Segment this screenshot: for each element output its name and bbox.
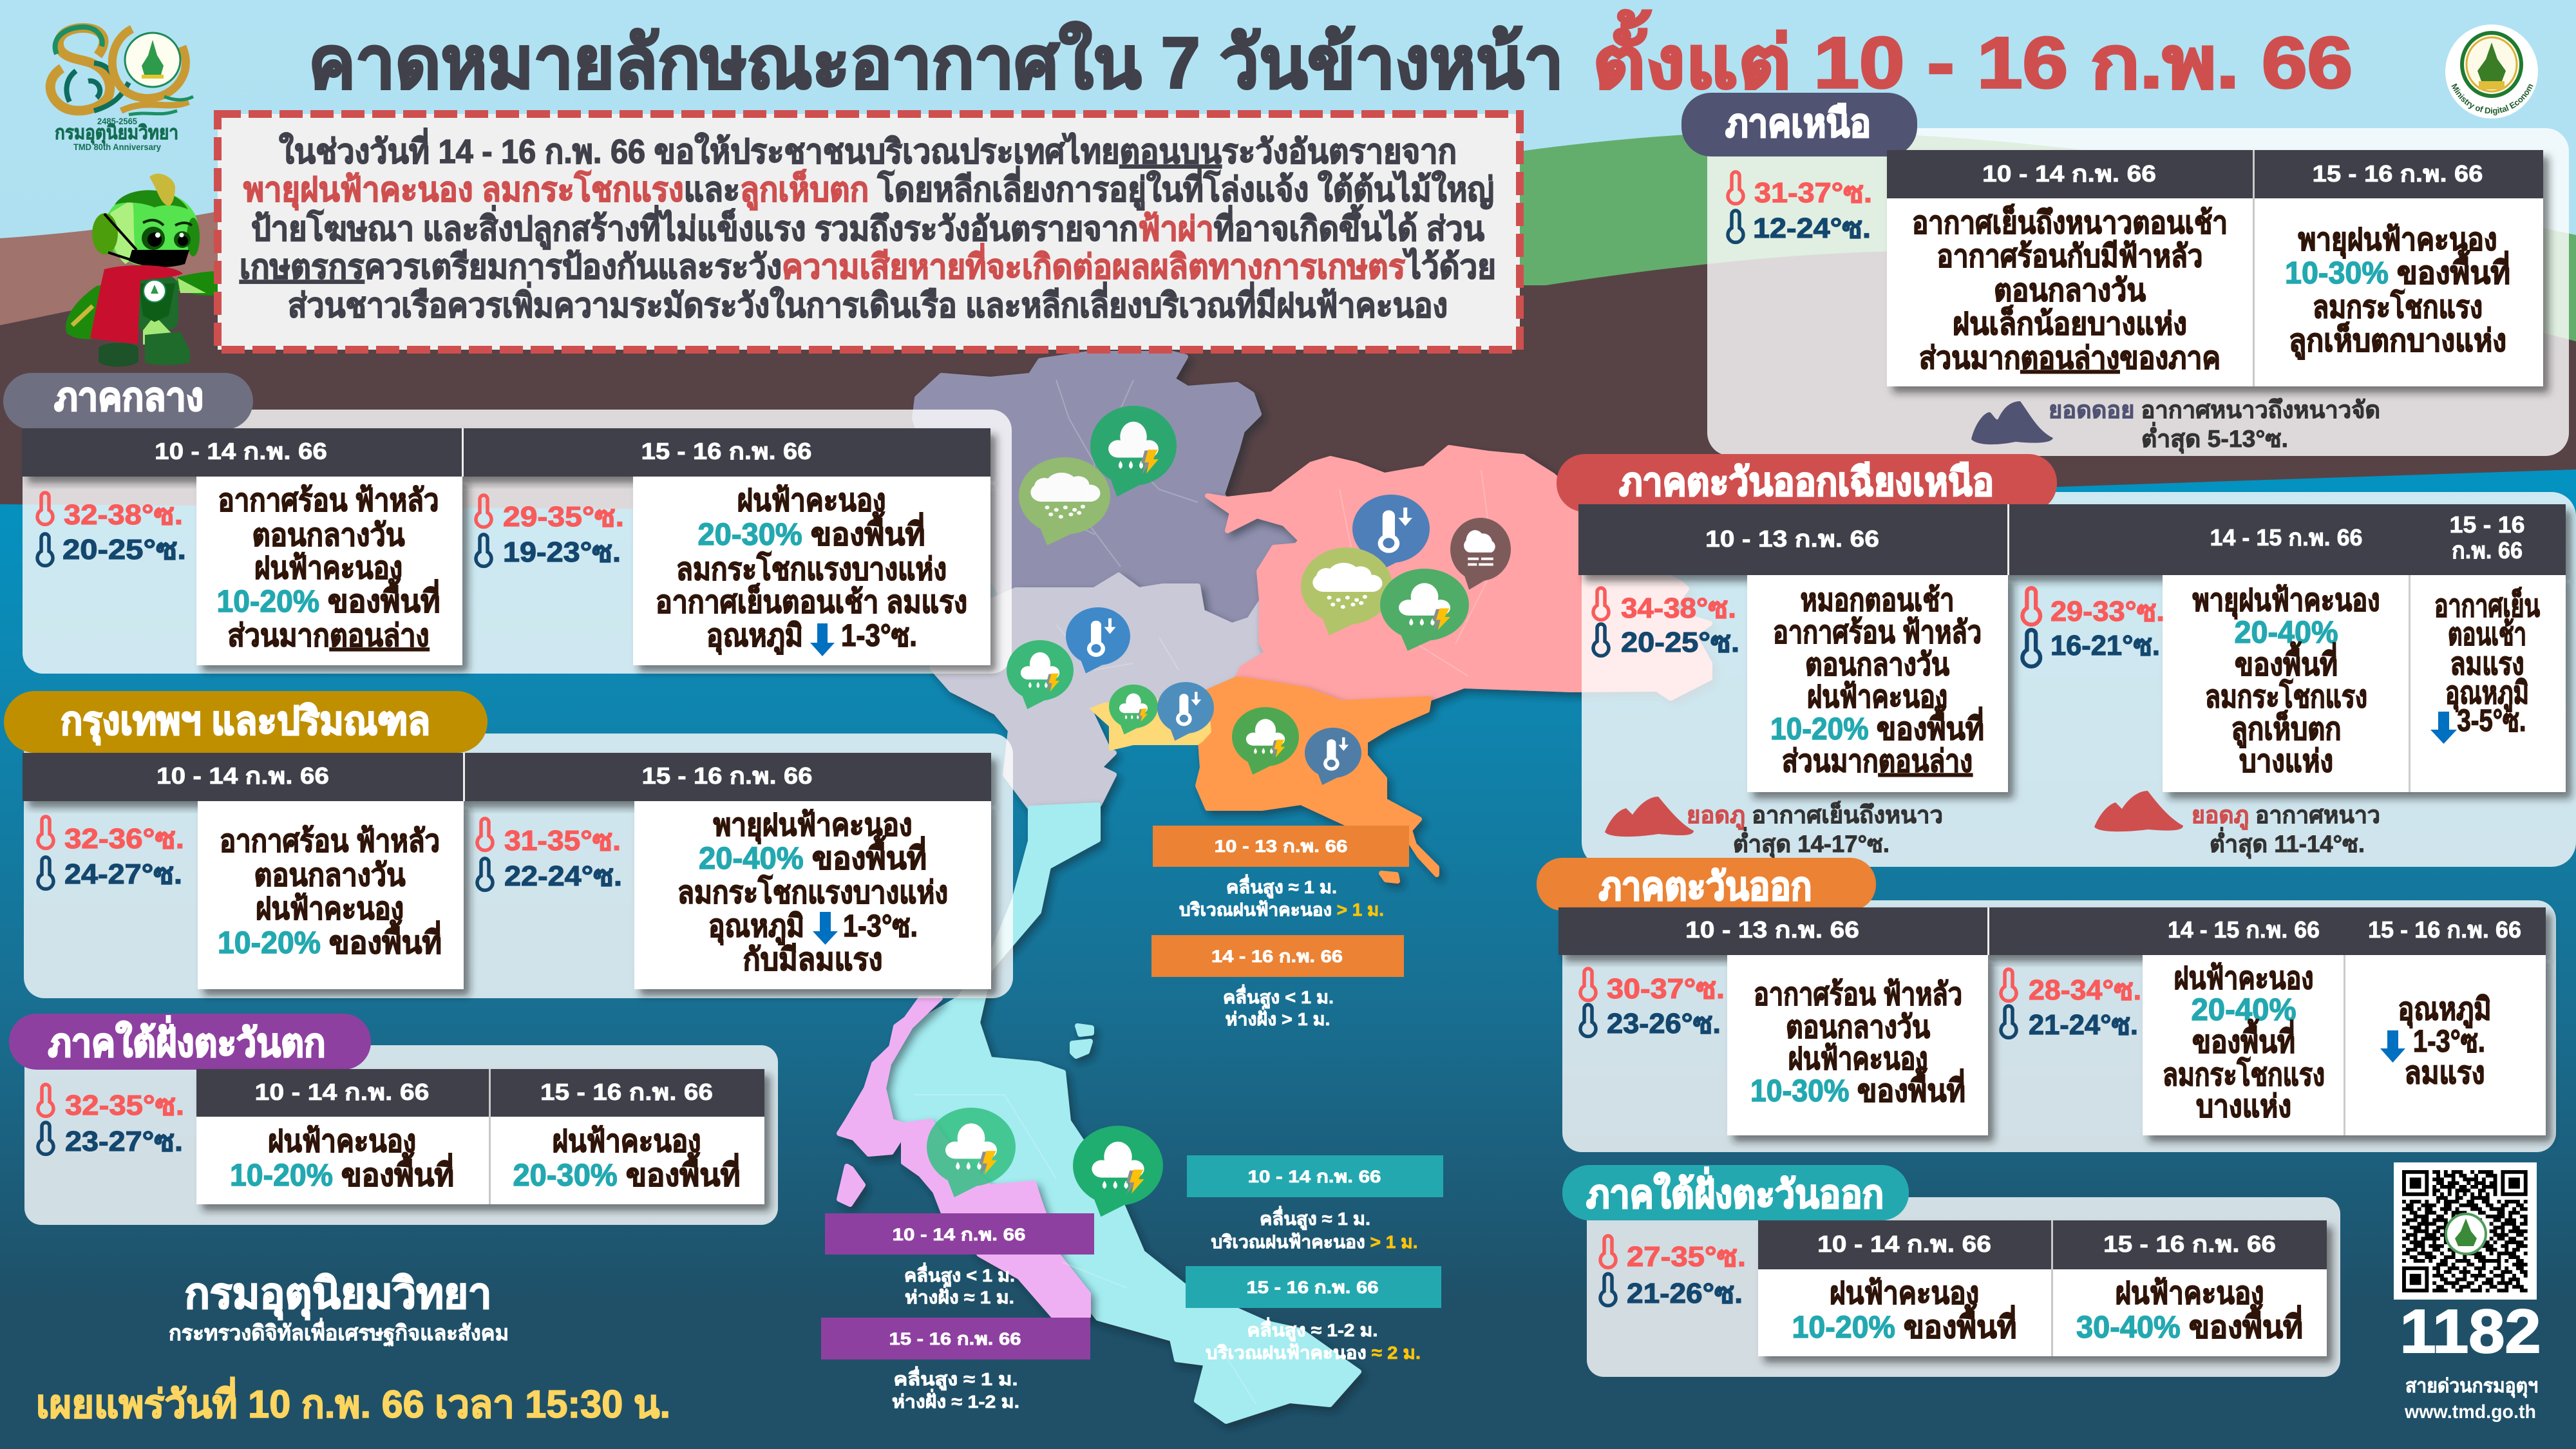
wave box: gulf south 15-16 xyxy=(1186,1266,1441,1363)
summit note: northern: ยอดดอย อากาศหนาวถึงหนาวจัด xyxy=(2049,397,2380,423)
temperatures: northern: 31-37°ซ. xyxy=(1754,177,1872,209)
footer: published date: เผยแพร่วันที่ 10 ก.พ. 66 เวลา 15:30 น. xyxy=(36,1377,670,1426)
table: bangkok: 10 - 14 ก.พ. 66 xyxy=(156,762,329,789)
rose hill xyxy=(0,194,966,399)
temperatures: eastern 14-15: 21-24°ซ. xyxy=(2029,1009,2138,1041)
summit note: northeast left: ต่ำสุด 14-17°ซ. xyxy=(1733,827,1889,859)
map pin: northeast cold xyxy=(1352,495,1430,573)
table: bangkok: 1-3°ซ. xyxy=(843,909,918,943)
table: south west xyxy=(196,1069,764,1204)
temperatures: eastern 14-15: 28-34°ซ. xyxy=(2029,974,2141,1006)
temperatures: northern: 12-24°ซ. xyxy=(1753,213,1871,244)
table: south east: ฝนฟ้าคะนอง xyxy=(2115,1276,2264,1311)
pill: south east: ภาคใต้ฝั่งตะวันออก xyxy=(1586,1167,1884,1216)
temperatures: central 15-16 xyxy=(476,495,624,568)
map pin: northeast fog xyxy=(1450,518,1511,590)
table: south east: 30-40% ของพื้นที่ xyxy=(2076,1304,2303,1345)
temperatures: northeast 10-13: 34-38°ซ. xyxy=(1621,592,1736,624)
ministry logo xyxy=(2445,24,2538,118)
wave box: andaman 10-14 xyxy=(825,1213,1094,1307)
table: eastern: 1-3°ซ. xyxy=(2413,1025,2485,1059)
table: northeast: 10 - 13 ก.พ. 66 xyxy=(1705,526,1879,552)
temperatures: northeast 14-15 xyxy=(2022,588,2164,667)
temperatures: south west: 32-35°ซ. xyxy=(65,1090,184,1121)
table: south west: 10-20% ของพื้นที่ xyxy=(230,1152,454,1193)
table: central: ฝนฟ้าคะนอง xyxy=(737,484,886,518)
temperatures: eastern 10-13 xyxy=(1580,969,1725,1039)
hotline label and website xyxy=(2404,1376,2538,1423)
pill: central xyxy=(3,373,253,430)
table: bangkok xyxy=(23,753,991,989)
table: northeast: 15 - 16 xyxy=(2450,511,2524,538)
logo: TMD 80th anniversary: TMD 80th Anniversary xyxy=(73,142,161,152)
table: central: 15 - 16 ก.พ. 66 xyxy=(641,438,811,464)
panel: northeastern region xyxy=(1557,454,2576,867)
wave box: gulf south 15-16: 15 - 16 ก.พ. 66 xyxy=(1247,1278,1378,1297)
table: eastern: ลมกระโชกแรง xyxy=(2163,1056,2325,1092)
map pin: east cold xyxy=(1305,728,1361,785)
wave box: andaman 15-16: 15 - 16 ก.พ. 66 xyxy=(889,1329,1021,1349)
pill: northeast xyxy=(1557,454,2057,512)
notice line 5: ส่วนชาวเรือควรเพิ่มความระมัดระวังในการเดินเรือ และหลีกเลี่ยงบริเวณที่มีฝนฟ้าคะนอง xyxy=(288,282,1448,325)
wave box: gulf south 10-14: คลื่นสูง ≈ 1 ม. xyxy=(1260,1206,1370,1230)
temperatures: south west: 23-27°ซ. xyxy=(65,1126,183,1157)
wave box: andaman 15-16 xyxy=(821,1318,1090,1412)
table: northeast: 14 - 15 ก.พ. 66 xyxy=(2210,524,2362,551)
table: northern: ฝนเล็กน้อยบางแห่ง xyxy=(1953,305,2187,341)
temperatures: south east: 21-26°ซ. xyxy=(1627,1278,1743,1309)
wave box: eastern 10-13 xyxy=(1153,826,1409,920)
table: bangkok: อากาศร้อน ฟ้าหลัว xyxy=(220,824,440,858)
map region: southern east coast xyxy=(884,805,1359,1421)
footer: department xyxy=(169,1269,509,1347)
pill: northern xyxy=(1681,93,1917,156)
table: eastern: ของพื้นที่ xyxy=(2192,1019,2295,1059)
green hill xyxy=(1224,131,2576,361)
table: central: ฝนฟ้าคะนอง xyxy=(254,551,402,585)
temperatures: northeast 10-13 xyxy=(1593,588,1739,658)
table: central: 10-20% ของพื้นที่ xyxy=(216,578,440,619)
wave box: eastern 14-16 xyxy=(1151,935,1404,1029)
title xyxy=(308,10,2353,103)
hotline number: 1182 xyxy=(2400,1297,2541,1366)
panel: bangkok region xyxy=(4,691,1013,998)
table: central: 1-3°ซ. xyxy=(841,619,917,653)
table: central: 10 - 14 ก.พ. 66 xyxy=(155,438,327,464)
panel: southern west coast xyxy=(9,1014,778,1225)
sky background xyxy=(0,0,2576,515)
temperatures: south west xyxy=(38,1084,184,1157)
table: central: อากาศเย็นตอนเช้า ลมแรง xyxy=(656,583,967,620)
map pin: south west storm xyxy=(927,1108,1016,1197)
summit note: northern: ต่ำสุด 5-13°ซ. xyxy=(2141,422,2288,454)
table: northern: ตอนกลางวัน xyxy=(1994,274,2146,308)
table: northeast: ส่วนมากตอนล่าง xyxy=(1782,744,1973,779)
pill: central: ภาคกลาง xyxy=(54,375,204,419)
table: northeast: ตอนเช้า xyxy=(2448,618,2526,652)
temperatures: northeast 14-15: 16-21°ซ. xyxy=(2050,630,2160,661)
temperatures: south east: 27-35°ซ. xyxy=(1627,1241,1746,1273)
temperatures: bangkok 10-14 xyxy=(38,817,184,890)
pill: northeast: ภาคตะวันออกเฉียงเหนือ xyxy=(1619,460,1994,504)
table: eastern: ฝนฟ้าคะนอง xyxy=(1788,1042,1928,1076)
wave box: eastern 10-13: บริเวณฝนฟ้าคะนอง > 1 ม. xyxy=(1179,900,1384,920)
wave box: gulf south 10-14: บริเวณฝนฟ้าคะนอง > 1 ม. xyxy=(1211,1232,1418,1252)
table: bangkok: ลมกระโชกแรงบางแห่ง xyxy=(677,874,948,910)
pill: eastern xyxy=(1537,858,1876,911)
table: south west: 10 - 14 ก.พ. 66 xyxy=(255,1079,429,1105)
table: northern: พายุฝนฟ้าคะนอง xyxy=(2298,223,2497,259)
summit note: northeast right: ต่ำสุด 11-14°ซ. xyxy=(2210,827,2365,859)
wave box: andaman 15-16: คลื่นสูง ≈ 1 ม. xyxy=(894,1366,1018,1390)
temperatures: bangkok 10-14: 24-27°ซ. xyxy=(64,858,182,890)
table: northern: 10-30% ของพื้นที่ xyxy=(2285,250,2510,290)
pill: bangkok xyxy=(4,691,488,753)
table: northern: ลมกระโชกแรง xyxy=(2313,289,2483,325)
table: northern: ลูกเห็บตกบางแห่ง xyxy=(2289,321,2506,360)
table: northeast: 3-5°ซ. xyxy=(2458,704,2526,738)
table: south west: ฝนฟ้าคะนอง xyxy=(553,1124,701,1159)
table: central: อากาศร้อน ฟ้าหลัว xyxy=(218,484,439,518)
temperatures: eastern 10-13: 23-26°ซ. xyxy=(1607,1008,1721,1039)
logo: TMD 80th anniversary: กรมอุตุนิยมวิทยา xyxy=(55,122,178,145)
table: eastern xyxy=(1558,907,2546,1135)
temperatures: northeast 14-15: 29-33°ซ. xyxy=(2050,596,2164,627)
table: northern: อากาศร้อนกับมีฟ้าหลัว xyxy=(1937,240,2202,274)
summit note: northeast right xyxy=(2192,802,2380,859)
table: central xyxy=(22,428,990,665)
table: northern: ส่วนมากตอนล่างของภาค xyxy=(1919,341,2221,375)
wave box: andaman 10-14: คลื่นสูง < 1 ม. xyxy=(904,1262,1015,1287)
table: south west: 15 - 16 ก.พ. 66 xyxy=(540,1079,713,1105)
map pin: northeast storm xyxy=(1380,569,1469,651)
footer: department: กรมอุตุนิยมวิทยา xyxy=(184,1269,492,1320)
temperatures: central 15-16: 19-23°ซ. xyxy=(503,536,621,568)
mascot xyxy=(66,174,236,367)
map pin: northeast heavy rain xyxy=(1301,547,1392,636)
temperatures: central 10-14: 32-38°ซ. xyxy=(64,499,183,531)
table: northeast: ลมแรง xyxy=(2450,647,2524,681)
summit note: northeast left: ยอดภู อากาศเย็นถึงหนาว xyxy=(1687,800,1943,830)
sea background xyxy=(0,464,2576,1449)
pill: south west xyxy=(9,1014,371,1070)
table: central: ลมกระโชกแรงบางแห่ง xyxy=(676,551,947,587)
table: bangkok: 10-20% ของพื้นที่ xyxy=(218,920,442,960)
table: northeast: บางแห่ง xyxy=(2239,744,2333,779)
wave box: eastern 14-16: 14 - 16 ก.พ. 66 xyxy=(1211,947,1343,966)
table: south east: 15 - 16 ก.พ. 66 xyxy=(2103,1231,2276,1257)
table: northern: 15 - 16 ก.พ. 66 xyxy=(2312,160,2483,187)
temperatures: central 10-14 xyxy=(37,493,186,565)
wave box: gulf south 10-14: 10 - 14 ก.พ. 66 xyxy=(1248,1167,1381,1186)
temperatures: northern xyxy=(1728,172,1872,244)
panel: northern region xyxy=(1681,93,2569,456)
temperatures: south east xyxy=(1600,1236,1746,1309)
table: bangkok: อุณหภูมิ xyxy=(708,909,804,945)
table: bangkok: ฝนฟ้าคะนอง xyxy=(256,892,404,926)
table: south east xyxy=(1758,1220,2327,1356)
table: eastern: บางแห่ง xyxy=(2196,1090,2291,1124)
temperatures: bangkok 15-16: 22-24°ซ. xyxy=(504,860,622,892)
notice line 2: พายุฝนฟ้าคะนอง ลมกระโชกแรงและลูกเห็บตก โดยหลีกเลี่ยงการอยู่ในที่โล่งแจ้ง ใต้ต้นไม้ใหญ่ xyxy=(243,166,1494,211)
map pin: bangkok cold xyxy=(1157,682,1214,741)
temperatures: northeast 10-13: 20-25°ซ. xyxy=(1621,627,1739,658)
table: bangkok: 20-40% ของพื้นที่ xyxy=(699,835,927,876)
wave box: gulf south 15-16: บริเวณฝนฟ้าคะนอง ≈ 2 ม. xyxy=(1206,1343,1421,1363)
table: northeast: อุณหภูมิ xyxy=(2445,676,2529,712)
wave box: gulf south 15-16: คลื่นสูง ≈ 1-2 ม. xyxy=(1247,1317,1378,1341)
table: northeast: อากาศเย็น xyxy=(2434,587,2540,623)
dark brown hill xyxy=(0,251,2576,510)
table: northeast xyxy=(1578,504,2566,792)
icon: mountain northeast right xyxy=(2094,791,2183,831)
wave box: eastern 10-13: คลื่นสูง ≈ 1 ม. xyxy=(1226,874,1337,898)
table: central: ส่วนมากตอนล่าง xyxy=(228,619,429,653)
pill: northern: ภาคเหนือ xyxy=(1725,102,1871,145)
map pin: south east storm xyxy=(1073,1126,1163,1217)
table: south east: 10 - 14 ก.พ. 66 xyxy=(1817,1231,1991,1257)
hotline label and website: สายด่วนกรมอุตุฯ xyxy=(2405,1376,2538,1398)
table: eastern: 20-40% xyxy=(2191,993,2297,1027)
table: bangkok: 15 - 16 ก.พ. 66 xyxy=(641,762,813,789)
panel: central region xyxy=(3,373,1012,674)
wave box: andaman 10-14: 10 - 14 ก.พ. 66 xyxy=(893,1225,1025,1244)
map region: northern xyxy=(914,354,1301,625)
summit note: northern xyxy=(2049,397,2380,454)
table: bangkok: กับมีลมแรง xyxy=(743,943,882,977)
temperatures: bangkok 15-16 xyxy=(477,819,622,892)
map pin: north heavy rain xyxy=(1019,457,1110,545)
table: south east: 10-20% ของพื้นที่ xyxy=(1792,1304,2017,1345)
table: bangkok: ตอนกลางวัน xyxy=(254,858,406,893)
table: northeast: 20-40% xyxy=(2235,616,2338,650)
table: northern: 10 - 14 ก.พ. 66 xyxy=(1982,160,2156,187)
table: south west: ฝนฟ้าคะนอง xyxy=(268,1124,416,1159)
table: bangkok: พายุฝนฟ้าคะนอง xyxy=(714,808,912,844)
temperatures: central 10-14: 20-25°ซ. xyxy=(62,534,186,565)
map region: bangkok xyxy=(1089,694,1211,751)
table: northeast: ฝนฟ้าคะนอง xyxy=(1807,680,1947,714)
pill: eastern: ภาคตะวันออก xyxy=(1598,865,1812,908)
table: eastern: อุณหภูมิ xyxy=(2398,992,2491,1028)
table: northeast: ของพื้นที่ xyxy=(2235,641,2338,682)
map pin: central storm xyxy=(1007,640,1074,709)
map region: southern west coast xyxy=(839,998,1088,1316)
table: eastern: ตอนกลางวัน xyxy=(1786,1010,1930,1045)
map pin: central cold xyxy=(1066,607,1130,674)
map region: northeastern xyxy=(1208,448,1710,703)
table: eastern: ลมแรง xyxy=(2405,1056,2485,1090)
title: ตั้งแต่ 10 - 16 ก.พ. 66 xyxy=(1593,10,2353,103)
table: south east: ฝนฟ้าคะนอง xyxy=(1830,1276,1979,1311)
pill: bangkok: กรุงเทพฯ และปริมณฑล xyxy=(61,699,430,745)
temperatures: bangkok 10-14: 32-36°ซ. xyxy=(64,823,184,855)
table: northern: อากาศเย็นถึงหนาวตอนเช้า xyxy=(1912,204,2228,240)
panel: southern east coast xyxy=(1562,1165,2340,1377)
table: eastern: อากาศร้อน ฟ้าหลัว xyxy=(1754,978,1962,1012)
logo: TMD 80th anniversary: 2485-2565 xyxy=(97,116,137,126)
province lines xyxy=(914,380,1494,1404)
table: northeast: หมอกตอนเช้า xyxy=(1801,583,1954,618)
panel: eastern region xyxy=(1537,858,2556,1152)
title: คาดหมายลักษณะอากาศใน 7 วันข้างหน้า xyxy=(308,22,1564,103)
notice line 4: เกษตรกรควรเตรียมการป้องกันและระวังความเสียหายที่จะเกิดต่อผลผลิตทางการเกษตรไว้ด้วย xyxy=(240,243,1496,286)
table: northeast: 10-20% ของพื้นที่ xyxy=(1770,706,1984,746)
footer: department: กระทรวงดิจิทัลเพื่อเศรษฐกิจและสังคม xyxy=(169,1318,509,1347)
icon: mountain northeast left xyxy=(1605,797,1694,837)
notice line 3: ป้ายโฆษณา และสิ่งปลูกสร้างที่ไม่แข็งแรง รวมถึงระวังอันตรายจากฟ้าผ่าที่อาจเกิดขึ้นได้ ส่วน xyxy=(251,204,1484,250)
map pin: bangkok storm xyxy=(1109,685,1158,735)
thailand map xyxy=(839,354,1710,1421)
wave box: eastern 14-16: ห่างฝั่ง > 1 ม. xyxy=(1225,1006,1331,1029)
table: northeast: ลูกเห็บตก xyxy=(2231,710,2342,748)
table: eastern: 15 - 16 ก.พ. 66 xyxy=(2368,916,2521,943)
notice box xyxy=(218,114,1520,350)
summit note: northeast left xyxy=(1687,800,1943,859)
table: eastern: 10-30% ของพื้นที่ xyxy=(1750,1068,1965,1108)
wave box: andaman 10-14: ห่างฝั่ง ≈ 1 ม. xyxy=(905,1284,1014,1307)
table: northeast: ตอนกลางวัน xyxy=(1805,648,1949,682)
map pin: east storm xyxy=(1232,707,1299,775)
wave box: eastern 10-13: 10 - 13 ก.พ. 66 xyxy=(1215,837,1347,856)
table: central: อุณหภูมิ xyxy=(706,619,803,655)
table: central: 20-30% ของพื้นที่ xyxy=(698,511,925,552)
temperatures: eastern 10-13: 30-37°ซ. xyxy=(1607,973,1725,1005)
table: northeast: พายุฝนฟ้าคะนอง xyxy=(2192,583,2380,620)
table: northeast: ก.พ. 66 xyxy=(2452,537,2523,564)
table: northeast: อากาศร้อน ฟ้าหลัว xyxy=(1773,616,1982,650)
hotline label and website: www.tmd.go.th xyxy=(2404,1401,2536,1423)
table: northeast: ลมกระโชกแรง xyxy=(2205,678,2367,714)
wave box: gulf south 10-14 xyxy=(1187,1155,1443,1252)
temperatures: bangkok 15-16: 31-35°ซ. xyxy=(504,825,621,857)
notice line 1: ในช่วงวันที่ 14 - 16 ก.พ. 66 ขอให้ประชาชนบริเวณประเทศไทยตอนบนระวังอันตรายจาก xyxy=(279,128,1457,171)
table: northern xyxy=(1887,150,2543,386)
temperatures: central 15-16: 29-35°ซ. xyxy=(503,501,624,533)
icon: mountain north xyxy=(1971,401,2053,444)
wave box: andaman 15-16: ห่างฝั่ง ≈ 1-2 ม. xyxy=(892,1388,1019,1412)
wave box: eastern 14-16: คลื่นสูง < 1 ม. xyxy=(1223,984,1334,1009)
qr code xyxy=(2394,1162,2537,1300)
table: south west: 20-30% ของพื้นที่ xyxy=(513,1152,741,1193)
table: eastern: 10 - 13 ก.พ. 66 xyxy=(1685,916,1859,943)
temperatures: eastern 14-15 xyxy=(2001,969,2141,1041)
map region: central xyxy=(932,575,1267,808)
table: central: ตอนกลางวัน xyxy=(252,518,405,553)
map region: eastern xyxy=(1198,679,1437,881)
map pin: north storm xyxy=(1090,406,1177,497)
table: eastern: 14 - 15 ก.พ. 66 xyxy=(2168,916,2320,943)
table: eastern: ฝนฟ้าคะนอง xyxy=(2174,961,2313,996)
logo: TMD 80th anniversary xyxy=(50,27,193,152)
pill: south west: ภาคใต้ฝั่งตะวันตก xyxy=(48,1016,326,1065)
summit note: northeast right: ยอดภู อากาศหนาว xyxy=(2192,802,2380,830)
